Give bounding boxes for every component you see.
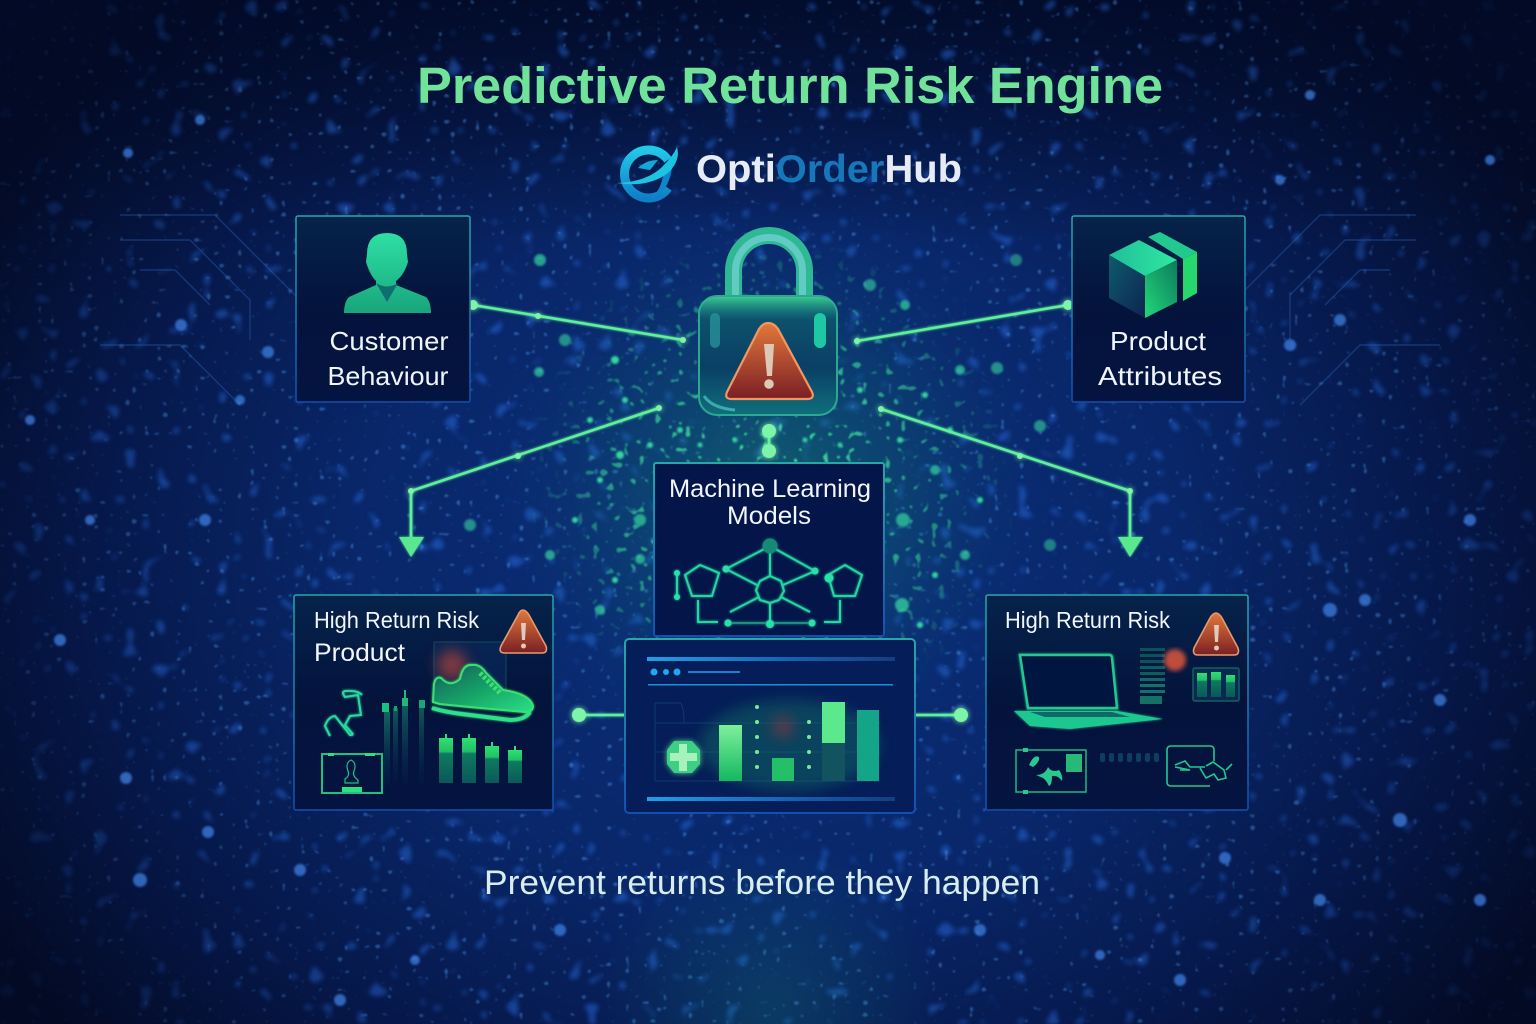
icon: photo frame bbox=[322, 753, 382, 793]
panel: right high return risk bbox=[986, 595, 1248, 810]
icon: warning triangle bbox=[500, 610, 546, 653]
heading: high return risk: High Return Risk bbox=[314, 607, 479, 633]
logo: OptiOrderHub bbox=[617, 147, 962, 199]
label: product attributes: Product bbox=[1110, 326, 1207, 356]
shoe backdrop bbox=[434, 642, 506, 702]
icon: laptop bbox=[1014, 655, 1163, 729]
label: machine learning models: Machine Learning bbox=[669, 475, 871, 503]
bar chart bbox=[439, 734, 522, 783]
dashboard dots bbox=[755, 705, 811, 769]
mini candle chart bbox=[382, 690, 425, 787]
heading: product: Product bbox=[314, 639, 405, 667]
label: machine learning models: Models bbox=[727, 502, 811, 530]
panel: dashboard bbox=[625, 639, 915, 813]
icon: shoe bbox=[432, 665, 533, 720]
icon: product box bbox=[1109, 232, 1197, 318]
dots row bbox=[1100, 753, 1159, 762]
arrow: down right bbox=[1118, 537, 1143, 557]
panel: left high return risk product bbox=[294, 595, 553, 810]
dashboard grid and glow bbox=[655, 700, 880, 790]
red glow bbox=[1164, 649, 1186, 671]
label: product attributes bbox=[1098, 326, 1222, 391]
network diagram bbox=[674, 538, 862, 628]
icon: track squiggle bbox=[325, 691, 362, 736]
label: product attributes: Attributes bbox=[1098, 361, 1222, 391]
dashboard bar chart bbox=[719, 702, 879, 781]
label: customer behaviour bbox=[328, 326, 449, 391]
label: machine learning models bbox=[669, 475, 871, 530]
tagline: Prevent returns before they happen bbox=[484, 864, 1040, 902]
label: customer behaviour: Behaviour bbox=[328, 361, 449, 391]
icon: squiggle box bbox=[1167, 746, 1232, 786]
label: customer behaviour: Customer bbox=[330, 326, 449, 356]
icon: logo swoosh bbox=[617, 147, 678, 199]
title: Predictive Return Risk Engine bbox=[417, 57, 1163, 114]
panel: customer behaviour bbox=[296, 216, 470, 402]
connector nodes bbox=[408, 300, 1133, 722]
wordmark: OptiOrderHub bbox=[696, 148, 962, 191]
mini bar chart bbox=[1193, 668, 1239, 701]
connector lines bbox=[411, 305, 1130, 715]
dashboard header bbox=[647, 657, 895, 686]
icon: padlock with warning bbox=[699, 236, 837, 415]
panel: product attributes bbox=[1072, 216, 1245, 402]
icon: map box bbox=[1016, 748, 1086, 794]
icon: warning triangle bbox=[1194, 613, 1238, 655]
panel: machine learning models bbox=[654, 463, 884, 636]
arrow: down left bbox=[399, 537, 424, 557]
striped block bbox=[1140, 648, 1165, 704]
icon: warning triangle bbox=[726, 323, 813, 399]
icon: medical plus bbox=[667, 741, 700, 773]
icon: person bbox=[344, 233, 431, 313]
heading: high return risk: High Return Risk bbox=[1005, 607, 1170, 633]
dashboard footer bar bbox=[647, 797, 895, 801]
